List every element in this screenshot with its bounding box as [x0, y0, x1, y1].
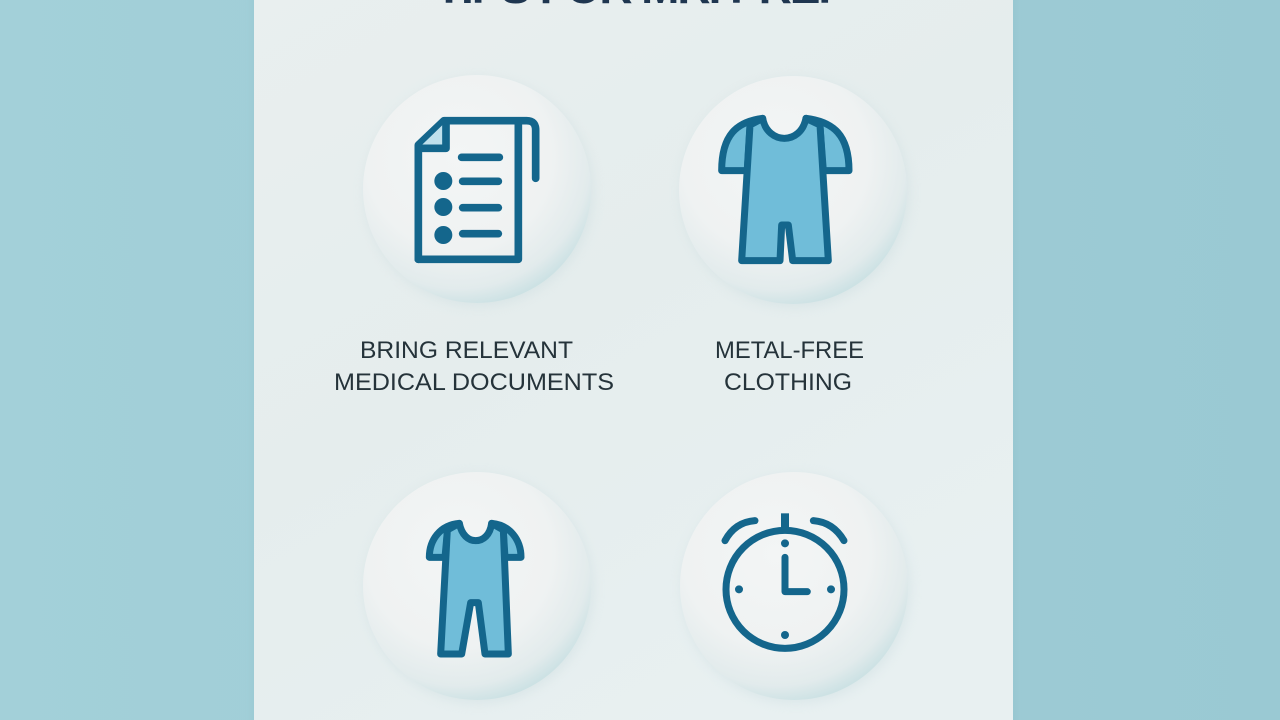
item: arrive on time [680, 472, 910, 703]
sphere: documents [363, 75, 593, 306]
icon: document with checklist [418, 121, 536, 259]
icon: alarm clock [725, 513, 844, 648]
panel: preparation card [251, 0, 1016, 720]
item: metal-free clothing [679, 76, 909, 396]
sphere: clock [680, 472, 910, 703]
icon: short-sleeve garment [722, 118, 849, 261]
sphere: gown [363, 472, 593, 703]
label: metal-free clothing: METAL-FREE [715, 337, 864, 364]
label: metal-free clothing [715, 337, 864, 396]
label: bring relevant medical documents: MEDICAL DOCUMENTS [334, 369, 614, 396]
item: medical documents [334, 75, 614, 396]
sphere: clothing [679, 76, 909, 307]
icon: long-leg gown [429, 523, 521, 654]
item: gown [363, 472, 593, 703]
label: bring relevant medical documents [334, 337, 614, 396]
label: bring relevant medical documents: BRING RELEVANT [360, 337, 573, 364]
label: metal-free clothing: CLOTHING [724, 369, 852, 396]
